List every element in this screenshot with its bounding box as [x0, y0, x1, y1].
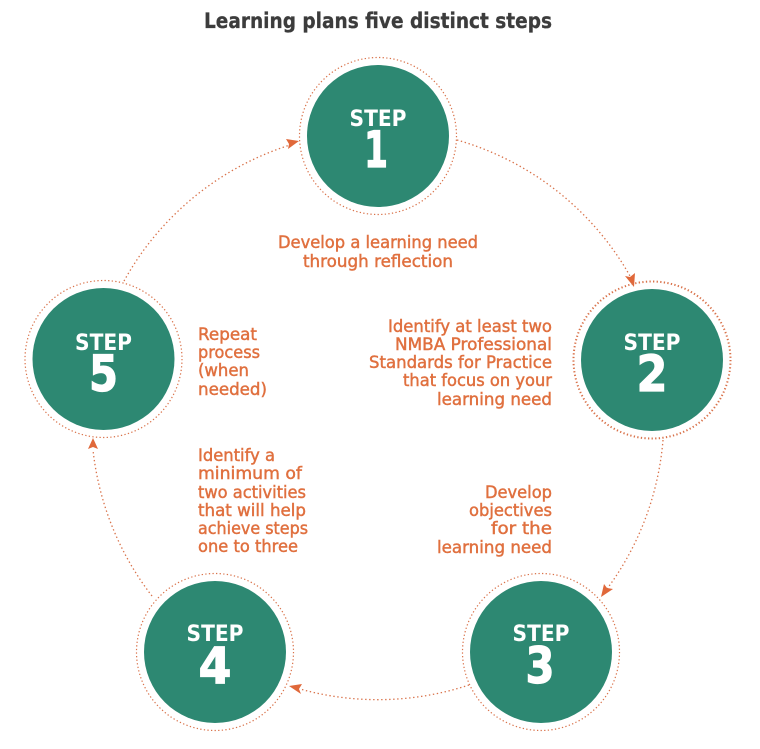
text: step 2 description: Identify at least two: [388, 317, 552, 336]
text: step 4 description: two activities: [198, 483, 306, 502]
text: step 5 description: Repeat: [198, 325, 258, 344]
text: step 5 description: process: [198, 343, 260, 362]
arrow: step 3 to step 4: [289, 684, 469, 700]
text: step 3 description: for the: [491, 519, 552, 538]
arrow: step 4 to step 5: [88, 438, 152, 596]
arrow: step 5 to step 1: [124, 139, 299, 281]
step 1 circle: 1: [364, 121, 388, 179]
text: step 3 description: learning need: [437, 538, 552, 557]
text: step 4 description: one to three: [198, 537, 298, 556]
text: step 2 description: NMBA Professional: [395, 335, 552, 354]
text: step 2 description: Standards for Practice: [369, 353, 552, 372]
text: step 5 description: (when: [198, 361, 249, 380]
text: step 4 description: [198, 446, 308, 556]
title: Learning plans five distinct steps: [204, 9, 552, 33]
text: step 4 description: achieve steps: [198, 519, 308, 538]
step 2 circle: [574, 282, 730, 438]
step 3 circle: [462, 574, 620, 730]
step 3 circle: STEP: [512, 622, 570, 647]
step 4 circle: STEP: [186, 622, 244, 647]
step 3 circle: 3: [526, 637, 554, 695]
text: step 1 description: Develop a learning need: [278, 233, 478, 252]
text: step 5 description: [198, 325, 267, 399]
text: step 1 description: [278, 233, 478, 271]
step 4 circle: 4: [198, 637, 232, 695]
step 5 circle: 5: [89, 345, 118, 403]
step 5 circle: STEP: [75, 331, 132, 356]
text: step 3 description: [437, 483, 552, 557]
step 1 circle: [300, 58, 456, 214]
arrow: step 1 to step 2: [457, 140, 635, 287]
step 2 circle: 2: [636, 345, 668, 403]
arrow: step 2 to step 3: [601, 440, 663, 597]
text: step 2 description: [369, 317, 552, 409]
text: step 5 description: needed): [198, 380, 267, 399]
step 1 circle: STEP: [350, 107, 406, 132]
text: step 3 description: Develop: [485, 483, 552, 502]
text: step 2 description: that focus on your: [403, 371, 552, 390]
step 5 circle: [25, 280, 182, 438]
text: step 4 description: minimum of: [198, 464, 303, 483]
text: step 4 description: that will help: [198, 501, 306, 520]
text: step 4 description: Identify a: [198, 446, 275, 465]
text: step 3 description: objectives: [469, 501, 552, 520]
text: step 1 description: through reflection: [303, 252, 453, 271]
step 2 circle: STEP: [624, 331, 680, 356]
step 4 circle: [136, 574, 294, 730]
text: step 2 description: learning need: [437, 390, 552, 409]
